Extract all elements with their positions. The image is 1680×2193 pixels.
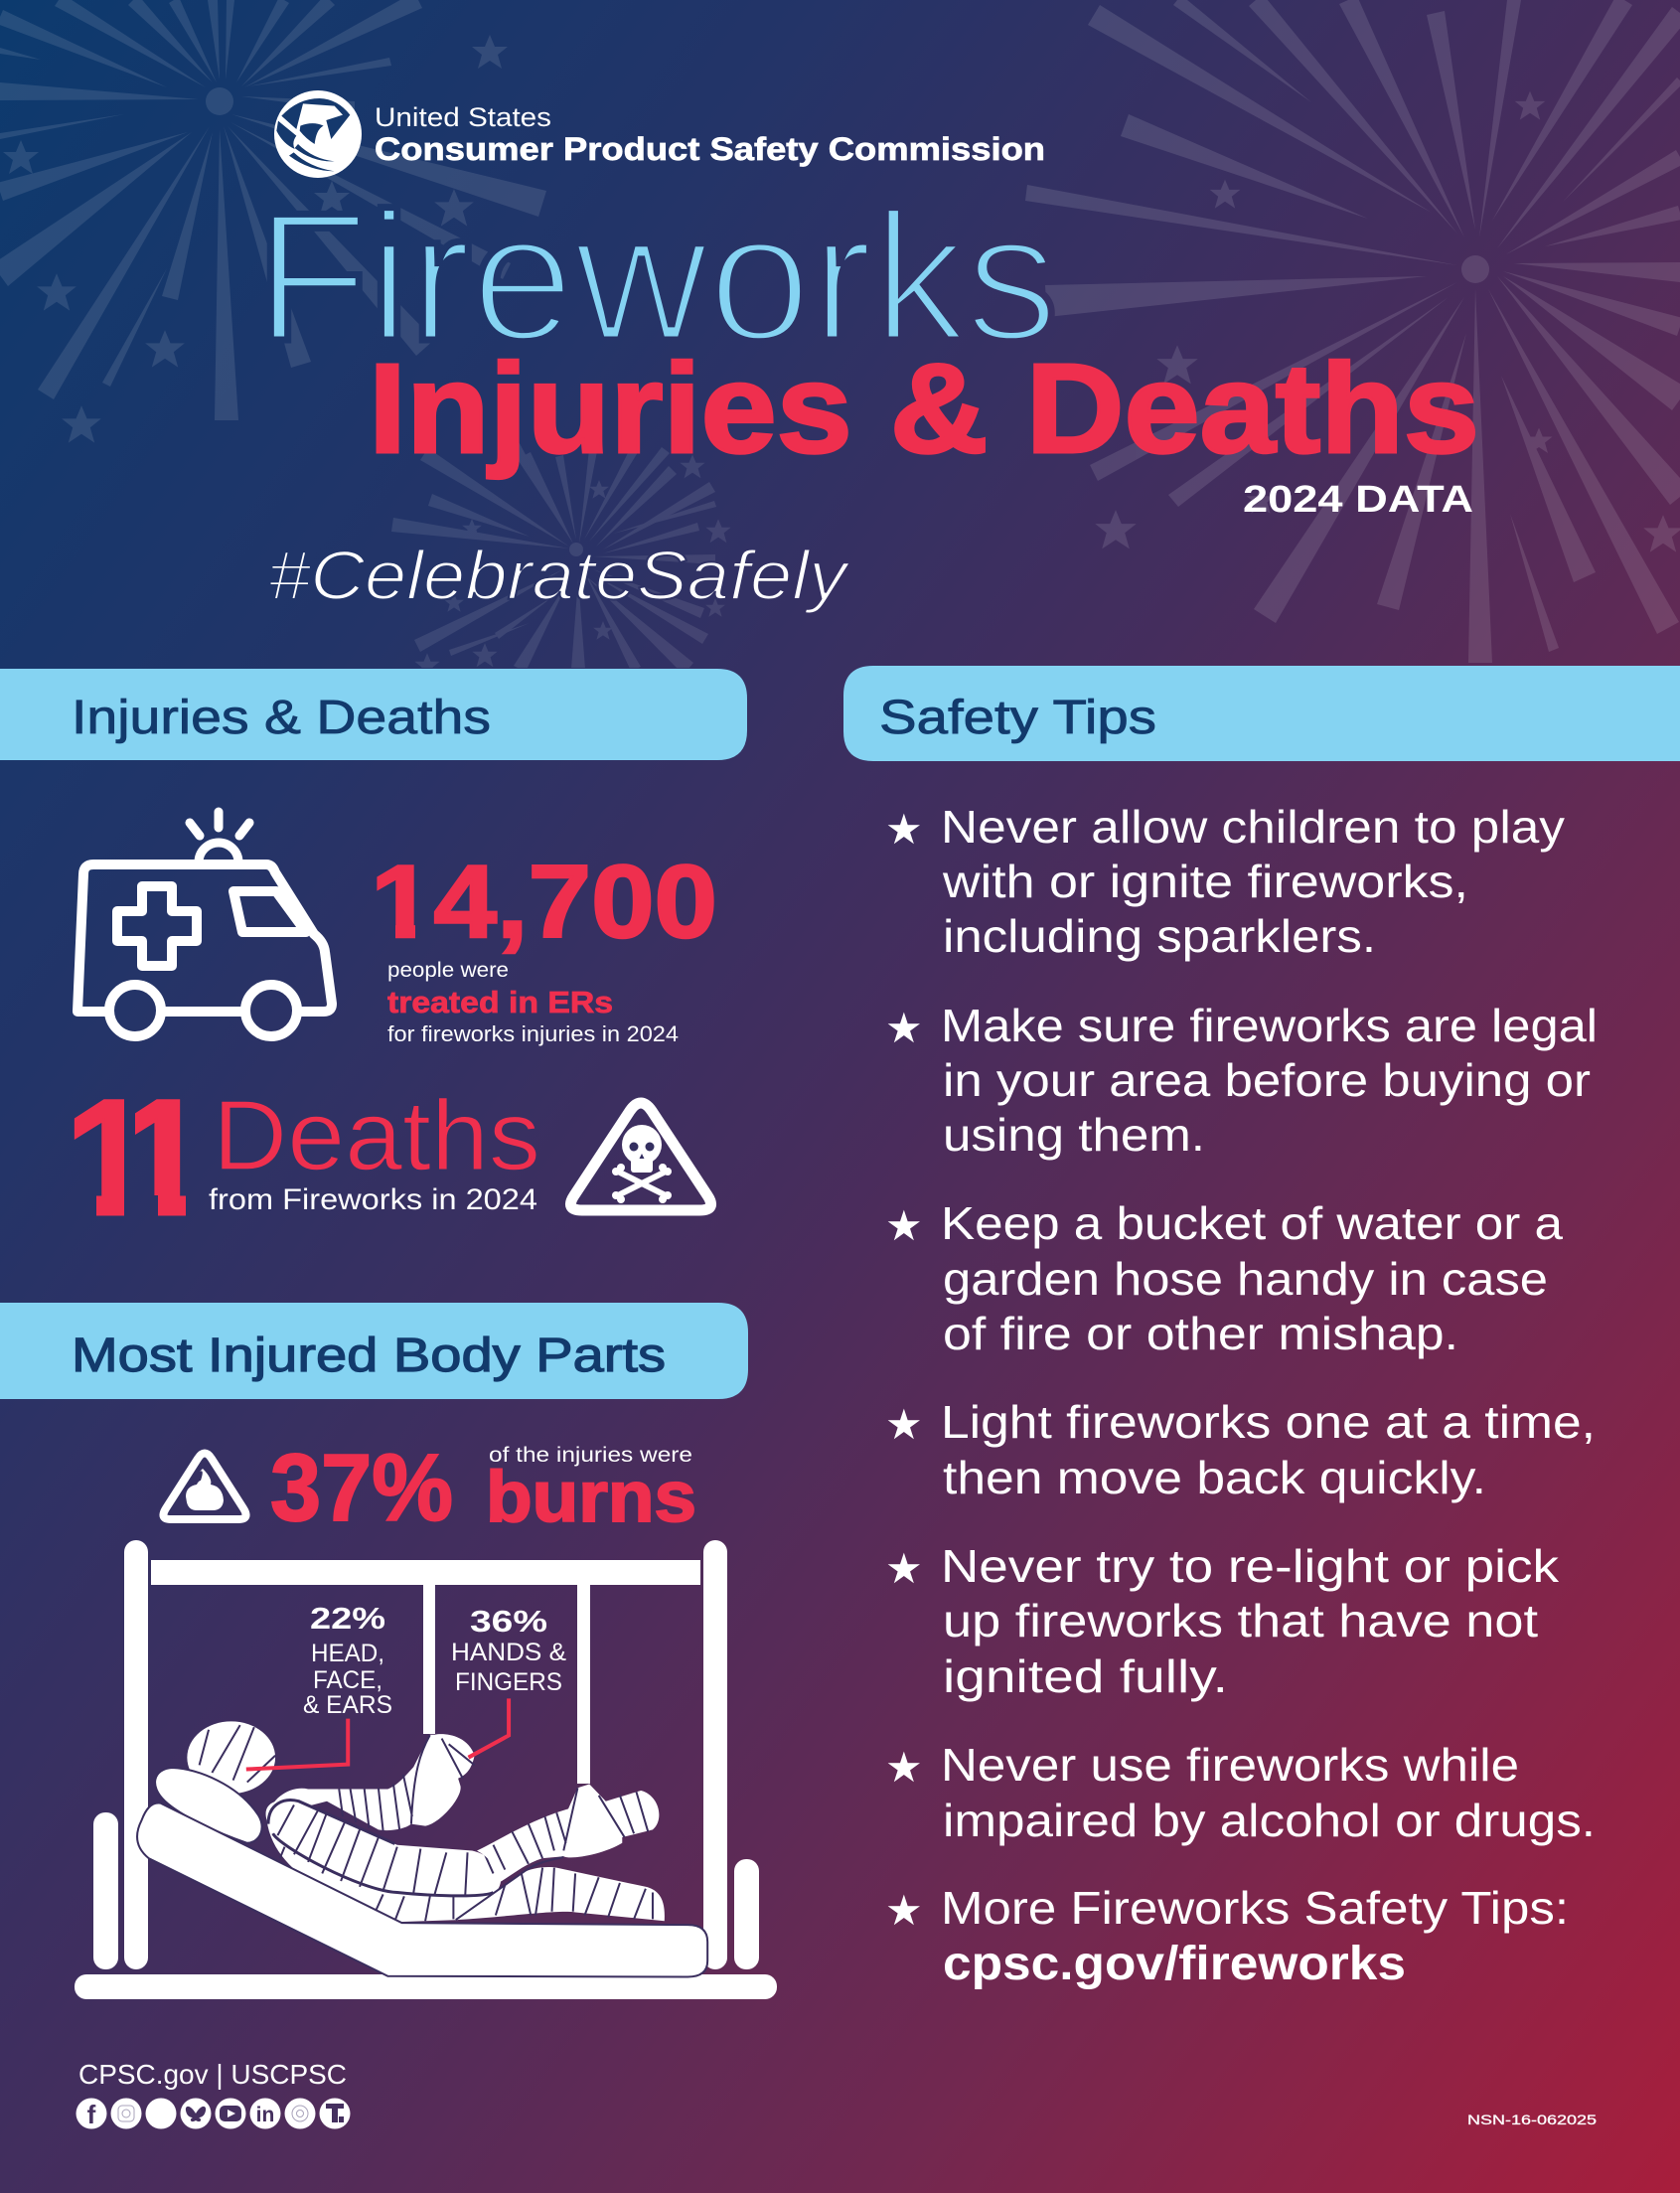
- title: Injuries & Deaths: Injuries & Deaths: [369, 338, 1479, 480]
- mattress: [137, 1802, 707, 1977]
- bandaged figure, drawn in zoom coordinates: [137, 1698, 707, 1977]
- footer: website and handle: CPSC.gov | USCPSC: [78, 2059, 347, 2090]
- social media icons: f: [87, 2100, 96, 2129]
- social media icons: [76, 2099, 350, 2129]
- tip 4: ★: [885, 1400, 923, 1449]
- stat caption: treated in ERs: for fireworks injuries in 2024: [387, 1021, 679, 1046]
- tip 6: ★: [885, 1743, 923, 1792]
- callout: hands and fingers: FINGERS: [455, 1668, 562, 1696]
- tip 3: garden hose handy in case: [943, 1253, 1548, 1305]
- tip 5: [885, 1540, 1560, 1702]
- tip 3: [885, 1197, 1563, 1359]
- panel heading: Most Injured Body Parts: [0, 1303, 748, 1399]
- tip 2: Make sure fireworks are legal: [941, 1000, 1598, 1051]
- callout: head, face and ears: HEAD,: [311, 1640, 384, 1667]
- panel heading: Safety Tips: [843, 666, 1680, 761]
- tip 1: with or ignite fireworks,: [942, 856, 1468, 907]
- tip 6: impaired by alcohol or drugs.: [943, 1795, 1596, 1846]
- tip 2: using them.: [943, 1109, 1205, 1161]
- bed frame: [75, 1540, 777, 1999]
- tip 6: [885, 1739, 1596, 1846]
- panel heading: Most Injured Body Parts: Most Injured Body Parts: [72, 1330, 666, 1382]
- tip 1: including sparklers.: [943, 910, 1376, 962]
- subtitle: 2024 DATA: 2024 DATA: [1243, 479, 1473, 521]
- panel heading: Safety Tips: Safety Tips: [879, 692, 1156, 744]
- stat caption: treated in ERs: treated in ERs: [387, 985, 613, 1019]
- tip 2: in your area before buying or: [943, 1054, 1591, 1106]
- stat caption: treated in ERs: people were: [387, 959, 509, 982]
- pillow: [155, 1768, 262, 1843]
- logo wordmark: [375, 102, 1045, 167]
- callout: hands and fingers: 36%: [470, 1604, 547, 1639]
- callout leader lines: [246, 1698, 509, 1770]
- fireworks background decoration: [0, 0, 1680, 677]
- stat: 14,700: 14,700: [371, 845, 717, 960]
- tip 3: of fire or other mishap.: [943, 1308, 1458, 1359]
- stat caption: from Fireworks in 2024: from Fireworks in 2024: [209, 1183, 537, 1216]
- title: Fireworks: Fireworks: [255, 174, 1058, 379]
- callout: hands and fingers: [451, 1604, 566, 1696]
- icon: burn warning triangle: [163, 1453, 246, 1519]
- upper leg, foot and sling: [477, 1784, 659, 1883]
- stat caption: treated in ERs: [387, 959, 679, 1046]
- tip 1: Never allow children to play: [941, 801, 1565, 853]
- icon: ambulance: [77, 812, 332, 1036]
- stat: 37%: 37%: [270, 1435, 453, 1541]
- tip 7: cpsc.gov/fireworks: [943, 1938, 1406, 1990]
- logo wordmark: Consumer Product Safety Commission: [375, 131, 1045, 167]
- publication number: NSN-16-062025: [1467, 2112, 1597, 2127]
- stat: Deaths: Deaths: [213, 1080, 540, 1191]
- social media icons: in: [256, 2104, 274, 2126]
- tip 1: [885, 801, 1565, 962]
- tip 7: More Fireworks Safety Tips:: [941, 1882, 1569, 1934]
- tip 4: Light fireworks one at a time,: [941, 1396, 1596, 1448]
- tip 2: [885, 1000, 1598, 1161]
- tip 5: Never try to re-light or pick: [941, 1540, 1560, 1592]
- tip 3: Keep a bucket of water or a: [941, 1197, 1563, 1249]
- tip 3: ★: [885, 1201, 923, 1250]
- stat caption: of the injuries were burns: of the injuries were: [489, 1444, 692, 1467]
- lower leg: [456, 1867, 665, 1921]
- tip 4: [885, 1396, 1596, 1503]
- callout: head, face and ears: 22%: [310, 1601, 385, 1636]
- callout: head, face and ears: [303, 1601, 392, 1719]
- callout: head, face and ears: FACE,: [313, 1666, 382, 1694]
- callout: hands and fingers: HANDS &: [451, 1639, 566, 1666]
- hashtag: #CelebrateSafely: [268, 537, 850, 614]
- tip 7: ★: [885, 1886, 923, 1935]
- stat: 11: 11: [65, 1066, 205, 1250]
- tip 7: [885, 1882, 1569, 1990]
- safety tips list: [885, 801, 1598, 1990]
- tip 2: ★: [885, 1004, 923, 1052]
- icon: skull warning triangle: [570, 1103, 711, 1210]
- logo: CPSC seal: [274, 90, 362, 178]
- tip 5: ★: [885, 1544, 923, 1593]
- tip 1: ★: [885, 805, 923, 854]
- panel heading: Injuries & Deaths: Injuries & Deaths: [72, 692, 491, 744]
- tip 5: ignited fully.: [943, 1650, 1228, 1702]
- torso: [266, 1800, 501, 1922]
- callout: head, face and ears: & EARS: [303, 1691, 392, 1719]
- arm band and sling: [268, 1734, 475, 1830]
- panel heading: Injuries & Deaths: [0, 669, 747, 760]
- illustration: patient in hospital bed: [75, 1540, 777, 1999]
- stat caption: of the injuries were burns: burns: [486, 1458, 696, 1537]
- tip 4: then move back quickly.: [943, 1452, 1486, 1503]
- logo wordmark: United States: [375, 102, 551, 132]
- tip 6: Never use fireworks while: [941, 1739, 1519, 1791]
- tip 5: up fireworks that have not: [943, 1595, 1538, 1646]
